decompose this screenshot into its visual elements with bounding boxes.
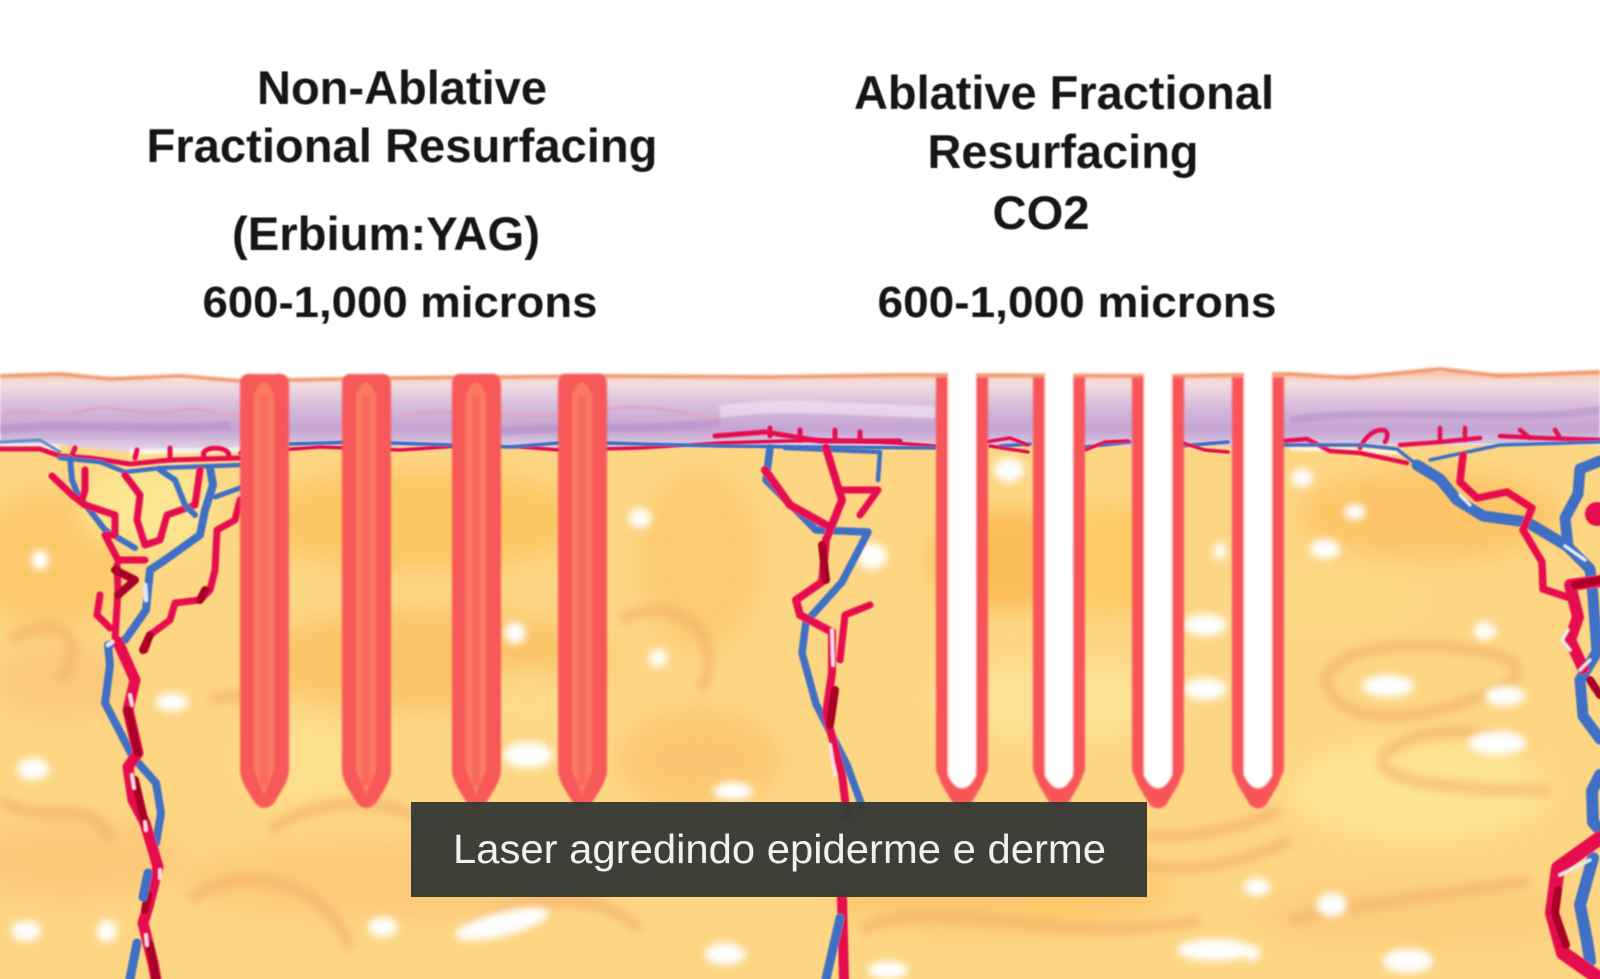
dermis swirl bands (0, 611, 1550, 950)
laser column 1 (240, 374, 289, 808)
heading: non-ablative fractional resurfacing: (Erbium:YAG) (232, 207, 540, 260)
heading: ablative fractional resurfacing: CO2 (992, 186, 1090, 239)
channel 3 (1132, 370, 1184, 808)
ablative laser channels (936, 370, 1284, 808)
channel 1 (936, 370, 988, 808)
heading: non-ablative fractional resurfacing (146, 61, 658, 327)
channel 2 (1033, 370, 1085, 808)
heading: ablative fractional resurfacing: Resurfacing (928, 125, 1198, 178)
dermis base (0, 445, 1600, 979)
vessels: epidermal junction line (240, 438, 1228, 453)
heading: ablative fractional resurfacing: 600-1,000 microns (878, 278, 1276, 327)
heading: non-ablative fractional resurfacing: 600-1,000 microns (202, 278, 598, 327)
vascular tree: middle (715, 428, 900, 979)
heading: non-ablative fractional resurfacing: Non-Ablative (257, 61, 547, 114)
heading: ablative fractional resurfacing (854, 66, 1276, 327)
laser column 4 (558, 374, 607, 808)
laser column 2 (342, 374, 391, 808)
non-ablative laser columns (240, 374, 607, 808)
heading: non-ablative fractional resurfacing: Fractional Resurfacing (146, 119, 658, 172)
fat cells (11, 458, 1526, 979)
panel: skin cross-section (0, 369, 1600, 979)
caption (411, 802, 1147, 897)
channel 4 (1232, 370, 1284, 808)
caption: Laser agredindo epiderme e derme (453, 826, 1106, 872)
vascular tree: left (0, 440, 240, 979)
vascular tree: right (1283, 428, 1600, 977)
heading: ablative fractional resurfacing: Ablative Fractional (854, 66, 1274, 119)
laser column 3 (452, 374, 501, 808)
dermis colour variation (0, 460, 1590, 950)
epidermis layer (0, 369, 1600, 452)
